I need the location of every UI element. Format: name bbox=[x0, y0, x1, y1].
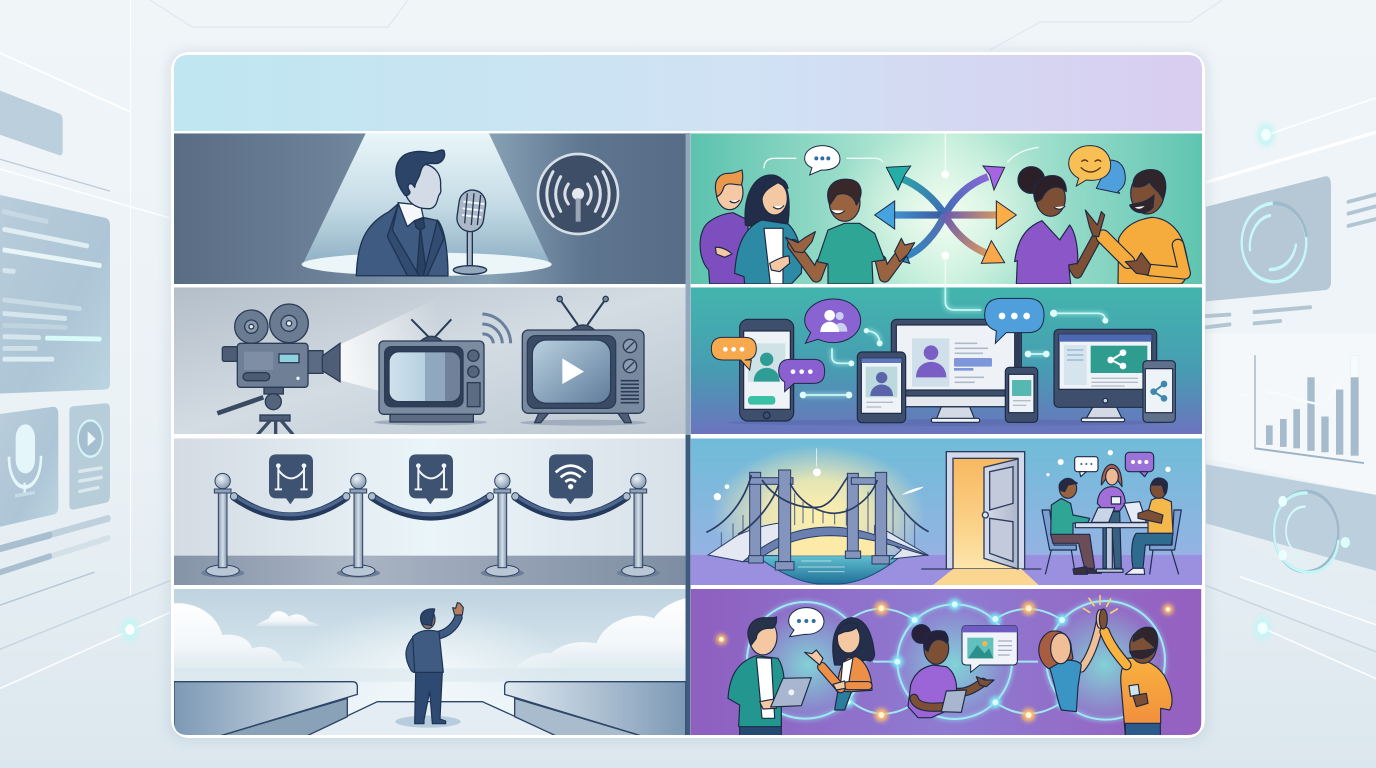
laptop on table bbox=[1091, 508, 1115, 522]
clap sparks bbox=[1083, 596, 1117, 613]
rope badge one bbox=[269, 454, 313, 504]
retro television bbox=[374, 319, 487, 425]
main card bbox=[167, 50, 1209, 742]
open door bbox=[921, 452, 1041, 585]
clouds bbox=[174, 598, 686, 668]
small white bubble bbox=[1075, 457, 1098, 477]
left ledge bbox=[174, 682, 357, 736]
left glowing node bbox=[121, 618, 139, 641]
glowing nodes bbox=[716, 598, 1173, 722]
small phone bbox=[1005, 367, 1038, 422]
right ring gauge card bbox=[1206, 176, 1331, 301]
left progress bars bbox=[0, 518, 108, 605]
glowing network connectors bbox=[803, 287, 1105, 395]
woman in blue bbox=[1039, 610, 1104, 712]
speech bubble top left bbox=[789, 608, 824, 637]
speech bubble bbox=[805, 146, 840, 175]
floor bbox=[174, 556, 686, 585]
right ring band bbox=[1206, 465, 1376, 572]
team around table bbox=[1042, 452, 1181, 574]
man with laptop bbox=[728, 617, 811, 737]
panel: velvet rope barrier bbox=[174, 438, 686, 585]
stanchion post one bbox=[201, 473, 244, 578]
right ledge bbox=[505, 682, 686, 736]
spotlight floor bbox=[302, 253, 552, 276]
woman in teal blazer bbox=[735, 175, 802, 284]
left main text panel bbox=[0, 195, 110, 393]
chair and seated person right bbox=[1125, 478, 1181, 574]
desktop monitor bbox=[891, 319, 1021, 422]
signal waves bbox=[482, 314, 511, 343]
quadrant: right panels top bbox=[691, 128, 1202, 434]
modern television with play button bbox=[520, 296, 647, 426]
wifi badge bbox=[549, 454, 593, 504]
right background dashboard panels bbox=[1206, 98, 1376, 679]
person waving, back view bbox=[395, 603, 463, 728]
high five pair bbox=[1039, 609, 1172, 737]
woman in purple bbox=[1015, 167, 1096, 284]
right bar chart bbox=[1241, 355, 1364, 463]
stanchion post four bbox=[617, 473, 660, 578]
tablet device bbox=[857, 352, 906, 423]
person group left bbox=[700, 170, 915, 284]
person group right bbox=[1015, 167, 1188, 284]
image card bubble bbox=[962, 626, 1017, 672]
stanchion post two bbox=[337, 473, 380, 578]
broadcast signal icon bbox=[538, 154, 618, 234]
suspension bridge bbox=[706, 470, 929, 584]
left video card bbox=[69, 403, 110, 510]
man in orange bbox=[1099, 609, 1172, 737]
sparkles bbox=[714, 450, 1171, 500]
purple chat bubble bbox=[779, 359, 825, 392]
bearded man in orange bbox=[1085, 170, 1188, 284]
woman with tablet bbox=[908, 625, 994, 718]
center walkway bbox=[306, 702, 557, 736]
quadrant: left panels top bbox=[174, 133, 686, 435]
panel: bridge and open door bbox=[691, 438, 1202, 585]
top decorative lines bbox=[150, 0, 1222, 50]
connector lines bbox=[764, 133, 1039, 284]
right glowing node lower bbox=[1254, 616, 1376, 679]
stanchion post three bbox=[481, 473, 524, 578]
velvet ropes bbox=[230, 493, 630, 516]
right glowing node upper bbox=[1257, 98, 1376, 147]
rope badge two bbox=[409, 454, 453, 504]
table bbox=[1075, 523, 1151, 528]
panel: connected collaboration bbox=[691, 589, 1202, 737]
blond man in purple bbox=[700, 170, 748, 284]
community bubble bbox=[805, 299, 861, 343]
woman in orange cardigan bbox=[805, 618, 875, 710]
quadrant: right panels bottom bbox=[691, 438, 1202, 737]
emoji speech bubbles bbox=[1069, 146, 1125, 193]
blue chat bubble bbox=[985, 298, 1044, 367]
orange chat bubble bbox=[711, 337, 756, 370]
panel: spokesperson spotlight bbox=[174, 133, 686, 284]
standing person center bbox=[1097, 464, 1125, 568]
small purple bubble bbox=[1125, 452, 1154, 477]
projector light bbox=[340, 308, 420, 390]
film camera on tripod bbox=[217, 304, 340, 435]
panel: connected devices bbox=[691, 287, 1202, 434]
left upper bar panel bbox=[0, 91, 63, 155]
diverging arrows bbox=[891, 177, 998, 256]
second desktop monitor bbox=[1054, 329, 1157, 422]
right small text lines bbox=[1206, 195, 1376, 327]
studio microphone bbox=[453, 188, 487, 274]
phone with profile bbox=[740, 319, 794, 421]
network circles bbox=[747, 601, 1165, 720]
person at microphone bbox=[356, 150, 448, 276]
left microphone card bbox=[0, 407, 58, 527]
left background dashboard panels bbox=[0, 0, 170, 688]
header band bbox=[174, 55, 1202, 131]
panel: conversation with arrows bbox=[690, 133, 1202, 284]
phone with share icon bbox=[1143, 361, 1175, 422]
man in teal shirt bbox=[785, 179, 915, 284]
spotlight beam bbox=[302, 133, 551, 265]
panel: person on open platform bbox=[174, 589, 686, 748]
quadrant: left panels bottom bbox=[174, 438, 686, 748]
chair and seated person left bbox=[1042, 478, 1101, 574]
connector nodes bbox=[800, 310, 1108, 398]
panel: television broadcast bbox=[174, 287, 686, 435]
